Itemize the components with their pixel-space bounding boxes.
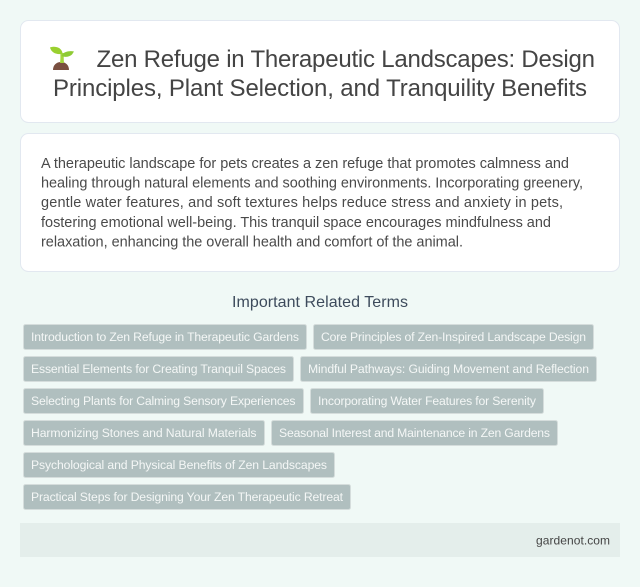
tag: core principles: Core Principles of Zen-Inspired Landscape Design (321, 330, 586, 344)
text: description paragraph: fostering emotional well-being. This tranquil space encourages mindfulness and (41, 215, 551, 231)
tag: seasonal interest: Seasonal Interest and Maintenance in Zen Gardens (279, 426, 550, 440)
heading: important related terms: Important Related Terms (232, 294, 408, 311)
title (53, 46, 595, 102)
tag list (24, 324, 596, 510)
icon: sprout (50, 47, 74, 70)
tag: mindful pathways (300, 356, 596, 382)
text: description paragraph: relaxation, enhancing the overall health and comfort of the animal. (41, 234, 463, 250)
panel: description (20, 134, 620, 272)
tag: seasonal interest (272, 420, 558, 446)
footer (20, 523, 620, 557)
panel: title card (20, 20, 620, 122)
tag: harmonizing stones (24, 420, 264, 446)
title: Zen Refuge in Therapeutic Landscapes: Design (96, 46, 595, 73)
text: description paragraph (41, 156, 583, 250)
footer: gardenot.com (536, 534, 610, 548)
tag: practical steps: Practical Steps for Designing Your Zen Therapeutic Retreat (31, 490, 344, 504)
tag: mindful pathways: Mindful Pathways: Guiding Movement and Reflection (308, 362, 589, 376)
tag: practical steps (24, 484, 350, 510)
text: description paragraph: A therapeutic landscape for pets creates a zen refuge that promotes calmness and (41, 156, 569, 172)
tag: introduction: Introduction to Zen Refuge in Therapeutic Gardens (31, 330, 299, 344)
tag: core principles (314, 324, 594, 350)
tag: water features: Incorporating Water Features for Serenity (318, 394, 537, 408)
text: description paragraph: gentle water features, and soft textures helps reduce stress and anxiety in pets, (41, 195, 563, 211)
text: description paragraph: healing through natural elements and soothing environments. Incorporating greenery, (41, 176, 583, 192)
tag: essential elements (24, 356, 294, 382)
title: Principles, Plant Selection, and Tranquility Benefits (53, 75, 587, 102)
tag: selecting plants (24, 388, 304, 414)
tag: harmonizing stones: Harmonizing Stones and Natural Materials (31, 426, 256, 440)
tag: benefits (24, 452, 334, 478)
tag: benefits: Psychological and Physical Benefits of Zen Landscapes (31, 458, 327, 472)
tag: introduction (24, 324, 306, 350)
tag: water features (310, 388, 544, 414)
tag: selecting plants: Selecting Plants for Calming Sensory Experiences (31, 394, 296, 408)
tag: essential elements: Essential Elements for Creating Tranquil Spaces (31, 362, 286, 376)
